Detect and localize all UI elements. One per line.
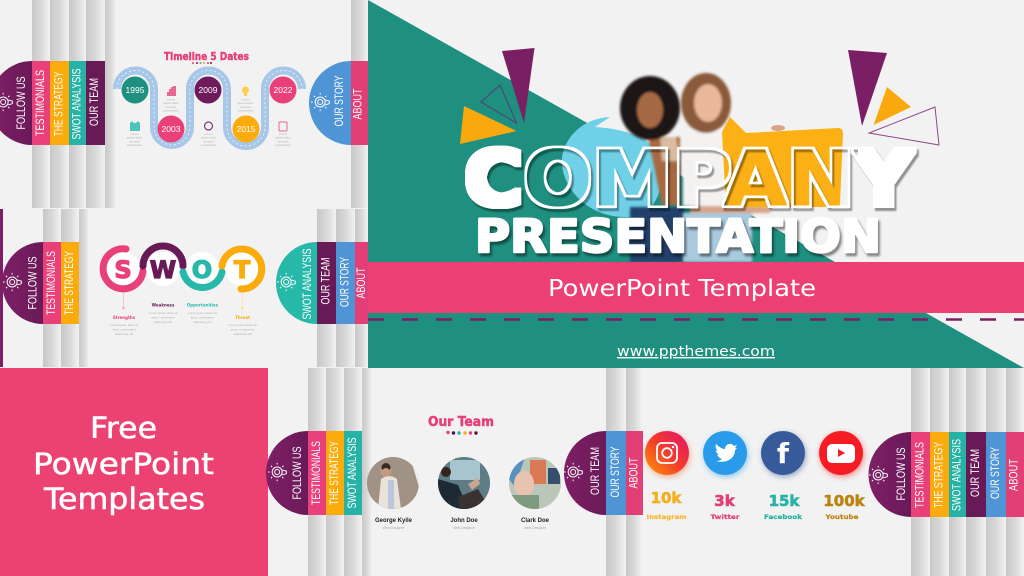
tab: testimonials: TESTIMONIALS	[46, 251, 58, 315]
photo: george kyile	[367, 457, 419, 509]
label: threat: amet, consectetur	[231, 328, 254, 332]
tab: our story	[986, 432, 1006, 517]
date: 2022	[270, 76, 296, 104]
label: strengths: Strengths	[113, 315, 136, 320]
heading dots	[192, 62, 212, 64]
dashed divider	[368, 318, 1024, 321]
stat: instagram	[646, 489, 687, 521]
decorative triangle: orange right	[874, 87, 911, 125]
icon: document with note: consectetur	[275, 143, 291, 147]
icon: twitter	[703, 431, 748, 477]
swot rings	[103, 246, 262, 289]
tab: our story: OUR STORY	[334, 75, 346, 126]
tab: our team	[317, 242, 336, 324]
name: john doe: Web Designer	[453, 526, 476, 530]
tab: about	[355, 242, 368, 324]
name: john doe	[450, 518, 478, 530]
stat: twitter: 3k	[714, 492, 736, 510]
tab: about: ABOUT	[1008, 459, 1020, 491]
name: george kyile	[375, 518, 413, 530]
panel: free templates	[0, 368, 268, 576]
icon: teal gift with note	[127, 122, 142, 147]
tab: about: ABOUT	[628, 458, 640, 488]
label: weakness: amet, consectetur	[151, 316, 175, 320]
label: weakness: Weakness	[152, 302, 175, 308]
stat: facebook: Facebook	[764, 513, 803, 521]
decorative triangle: purple right	[848, 50, 887, 126]
label: threat: adipiscing elit	[233, 332, 252, 336]
tab: testimonials: TESTIMONIALS	[311, 441, 323, 505]
tab: swot analysis: SWOT ANALYSIS	[347, 437, 359, 508]
swot letters: W	[150, 256, 176, 284]
tab: our team: OUR TEAM	[89, 78, 101, 126]
swot letters	[114, 256, 251, 284]
icon: head with note: Lorem	[204, 132, 213, 136]
tab: testimonials	[911, 432, 930, 517]
tab: our team	[564, 431, 606, 515]
name: john doe: John Doe	[450, 518, 478, 524]
photo: john doe	[438, 457, 490, 509]
tab: about: ABOUT	[356, 268, 368, 298]
icon: teal gift with note: Lorem	[130, 132, 139, 136]
hand	[771, 125, 785, 131]
stat: instagram: Instagram	[646, 513, 687, 521]
tab: follow us: FOLLOW US	[292, 446, 304, 500]
tab: testimonials	[32, 61, 50, 145]
tab: swot analysis	[344, 431, 362, 515]
tab: testimonials	[43, 242, 61, 324]
heading: timeline 5 dates: Timeline 5 Dates	[164, 51, 249, 63]
date: 2009: 2009	[199, 85, 218, 95]
tab: our story	[309, 61, 351, 145]
people and speech bubbles	[562, 73, 843, 262]
tab: about	[626, 431, 643, 515]
icon: bulb with note: ipsum dolor	[238, 101, 253, 105]
date: 2003	[158, 116, 184, 142]
tab: our story	[336, 242, 355, 324]
photo: clark doe	[509, 457, 561, 509]
stat: youtube: 100k	[823, 492, 866, 510]
tab: the strategy: THE STRATEGY	[329, 441, 341, 505]
tab: swot analysis	[69, 61, 86, 145]
pink band	[368, 262, 1024, 313]
label: strengths: Lorem ipsum dolor sit	[110, 323, 138, 327]
name: clark doe	[521, 518, 550, 530]
tab: swot analysis: SWOT ANALYSIS	[952, 439, 964, 511]
tab: about	[351, 61, 368, 145]
tab: follow us	[266, 431, 308, 515]
name: clark doe: Web Designer	[524, 526, 547, 530]
tab: our team	[86, 61, 105, 145]
icon: bar chart with note: ipsum dolor	[163, 101, 179, 105]
person: left woman	[620, 76, 684, 262]
tab: the strategy: THE STRATEGY	[64, 251, 76, 315]
icon: document with note: sit amet	[278, 139, 288, 143]
icon: head with note: ipsum dolor	[201, 136, 216, 140]
decorative triangle: outline right	[869, 107, 939, 145]
label: strengths: amet, consectetur	[112, 328, 136, 332]
date: 2009	[194, 76, 222, 104]
swot letters: T	[234, 256, 251, 284]
title: company: COMPANY	[464, 134, 914, 223]
label: strengths: adipiscing elit	[115, 332, 133, 336]
icon: head with note: consectetur	[201, 143, 216, 147]
tab: the strategy	[930, 432, 949, 517]
tab: follow us	[869, 432, 911, 517]
blue speech bubble	[562, 117, 662, 217]
icon: document with note	[275, 122, 291, 147]
tab: our team: OUR TEAM	[590, 447, 602, 495]
icon: bulb with note	[238, 86, 253, 113]
text: free powerpoint templates: Free	[90, 411, 157, 445]
icon: teal gift with note: ipsum dolor	[127, 136, 142, 140]
tab: the strategy: THE STRATEGY	[934, 442, 946, 508]
date: 1995	[122, 76, 148, 104]
tab: follow us	[2, 242, 43, 324]
text: free powerpoint templates: Templates	[43, 482, 205, 516]
label: opportunities	[187, 302, 219, 324]
tab: the strategy	[326, 431, 344, 515]
stat: instagram: 10k	[651, 489, 682, 507]
icon: facebook	[761, 431, 806, 477]
label: threat: Lorem ipsum dolor sit	[228, 323, 257, 327]
panel: social slide	[645, 368, 1024, 576]
icon: bulb with note: Lorem	[241, 98, 250, 102]
heading dots	[446, 431, 478, 435]
icon: bar chart with note	[163, 86, 179, 113]
decorative triangle: purple left	[502, 48, 534, 123]
label: threat: Threat	[235, 315, 250, 320]
heading: our team: Our Team	[428, 414, 494, 430]
tab: follow us: FOLLOW US	[896, 447, 908, 500]
name: george kyile: Web Designer	[382, 526, 405, 530]
tab: our story: OUR STORY	[340, 257, 352, 307]
tab: swot analysis: SWOT ANALYSIS	[302, 248, 314, 320]
icon: youtube	[819, 431, 864, 477]
text: free powerpoint templates: PowerPoint	[33, 447, 214, 481]
label: opportunities: Opportunities	[187, 302, 219, 308]
icon: bar chart with note: consectetur	[163, 109, 179, 113]
timeline road	[117, 71, 302, 146]
panel: team slide	[266, 368, 643, 576]
label: opportunities: adipiscing elit	[193, 320, 212, 324]
icon: head with note	[201, 122, 216, 147]
tab: about: ABOUT	[352, 88, 364, 120]
tab: our team: OUR TEAM	[970, 449, 982, 497]
date: 2015: 2015	[237, 124, 256, 134]
tab: our story: OUR STORY	[610, 446, 622, 498]
tab: follow us: FOLLOW US	[16, 76, 28, 130]
label: weakness: adipiscing elit	[154, 320, 172, 324]
icon: bulb with note: consectetur	[238, 109, 253, 113]
tab: testimonials	[308, 431, 326, 515]
swot letters: S	[114, 256, 132, 284]
stat: twitter	[710, 492, 740, 521]
subtitle: PowerPoint Template	[548, 276, 816, 302]
text: free powerpoint templates	[33, 411, 214, 516]
stat: facebook: 15k	[769, 492, 800, 510]
icon: facebook: f	[777, 437, 790, 470]
tab: our story	[606, 431, 626, 515]
date: 2015	[232, 116, 260, 142]
label: weakness: Lorem ipsum dolor sit	[149, 311, 177, 315]
panel: cover slide	[368, 0, 1024, 368]
date: 1995: 1995	[126, 85, 145, 95]
icon: bar chart with note: Lorem	[167, 98, 175, 102]
stat: facebook	[764, 492, 803, 521]
icon: document with note: ipsum dolor	[275, 136, 291, 140]
date: 2003: 2003	[162, 124, 181, 134]
tab: the strategy	[61, 242, 79, 324]
tab: the strategy	[50, 61, 69, 145]
tab: our team: OUR TEAM	[320, 258, 332, 304]
tab: testimonials: TESTIMONIALS	[914, 442, 926, 508]
stat: youtube: Youtube	[824, 513, 859, 521]
person: right woman	[681, 73, 770, 262]
title: presentation: PRESENTATION	[475, 210, 881, 263]
name: george kyile: George Kyile	[375, 518, 413, 524]
stat: youtube	[823, 492, 866, 521]
website link: www.ppthemes.com	[617, 344, 775, 360]
icon: instagram	[645, 431, 690, 477]
tab: the strategy: THE STRATEGY	[54, 71, 66, 136]
decorative triangle: orange left	[460, 106, 516, 144]
icon: head with note: sit amet	[203, 139, 214, 143]
date: 2022: 2022	[274, 85, 293, 95]
tab: swot analysis	[949, 432, 966, 517]
stat: twitter: Twitter	[710, 513, 740, 521]
tab: testimonials: TESTIMONIALS	[35, 70, 47, 136]
teal diagonal background	[368, 0, 1024, 368]
name: clark doe: Clark Doe	[521, 518, 550, 524]
panel: timeline slide	[0, 0, 368, 208]
label: opportunities: Lorem ipsum dolor sit	[188, 311, 217, 315]
label: weakness	[149, 302, 178, 324]
icon: bar chart with note: sit amet	[166, 105, 176, 109]
label: strengths	[110, 293, 138, 336]
icon: teal gift with note: consectetur	[127, 143, 142, 147]
icon: teal gift with note: sit amet	[129, 139, 140, 143]
tab: our team	[966, 432, 986, 517]
swot letters: O	[192, 256, 212, 284]
label: opportunities: amet, consectetur	[191, 316, 214, 320]
tab: our story: OUR STORY	[990, 447, 1002, 499]
decorative triangle: outline left	[481, 85, 516, 123]
tab: about	[1006, 432, 1024, 517]
tab: swot analysis: SWOT ANALYSIS	[72, 68, 84, 140]
panel: swot slide	[0, 209, 368, 367]
tab: follow us	[0, 61, 32, 145]
label: threat	[228, 293, 257, 336]
icon: bulb with note: sit amet	[240, 105, 251, 109]
orange speech bubble	[722, 117, 843, 207]
tab: follow us: FOLLOW US	[28, 256, 40, 310]
icon: document with note: Lorem	[279, 132, 287, 136]
tab: swot analysis	[276, 242, 317, 324]
